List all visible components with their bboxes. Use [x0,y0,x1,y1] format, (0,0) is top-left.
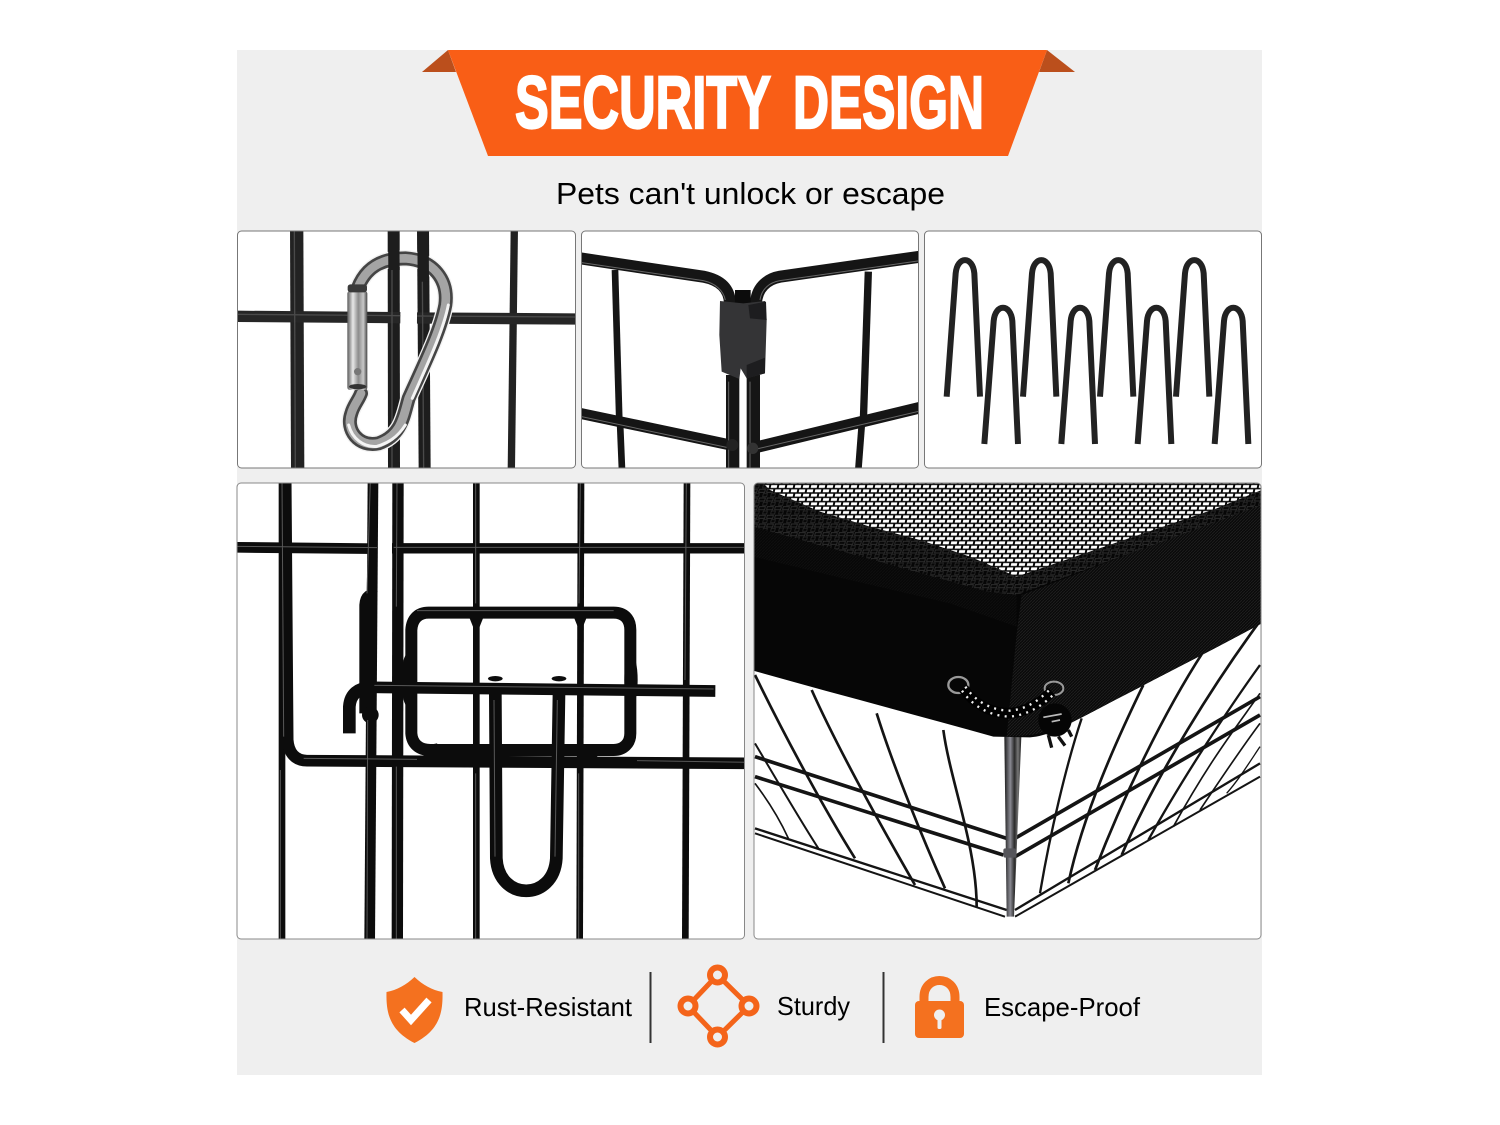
banner: security design [422,50,1075,156]
toggle stopper [1038,703,1072,737]
feature: sturdy: Sturdy [777,991,850,1021]
bolt details [362,618,638,765]
slide bolt [370,687,715,691]
title: SECURITY [515,61,771,144]
mesh outer band [753,483,1262,595]
feature: rust-resistant: Rust-Resistant [464,992,633,1022]
feature: sturdy [680,968,850,1044]
icon: hinge clip [719,290,767,454]
panel: ground stakes [924,231,1262,468]
subtitle: Pets can't unlock or escape [556,176,945,211]
hook guide [364,594,375,713]
panel: mesh cover on pen corner [753,483,1262,939]
feature: escape-proof [915,980,1141,1038]
highlights [237,480,747,942]
title: DESIGN [793,61,984,144]
panel: corner connector [580,231,920,470]
corner post [1004,737,1021,917]
icon: carabiner [347,258,448,446]
icon: padlock [915,980,964,1038]
mesh top [763,483,1262,577]
feature: rust-resistant [386,977,633,1043]
icon: shield [386,977,443,1043]
cover fabric [754,527,1260,738]
panel: carabiner clip on wire grid [237,228,577,470]
feature: escape-proof: Escape-Proof [984,992,1141,1022]
icon: network diamond [680,968,756,1044]
panel: door latch [237,480,747,942]
latch frame [411,613,630,750]
door frame rail [286,480,747,763]
cord with grommets [948,677,1072,748]
wire grid [755,623,1260,917]
background panel [237,50,1262,1075]
U handle [495,693,559,891]
